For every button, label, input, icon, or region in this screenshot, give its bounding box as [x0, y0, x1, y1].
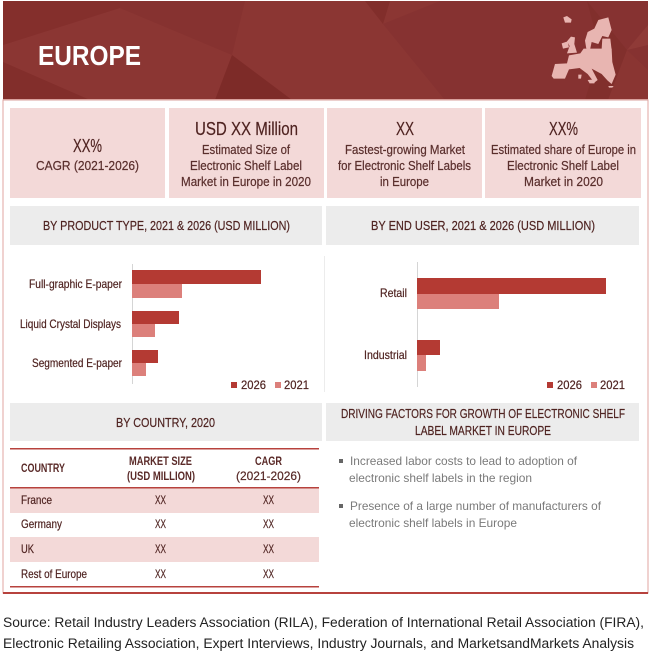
- table: by country: XX: [263, 493, 274, 507]
- table: by country: XX: [263, 542, 274, 556]
- table: by country: Rest of Europe: [21, 567, 87, 581]
- heading: by product type: BY PRODUCT TYPE, 2021 & 2026 (USD MILLION): [43, 218, 290, 233]
- legend: end user: [547, 378, 625, 392]
- bar chart: product type: Full-graphic E-paper: [29, 277, 122, 291]
- header banner: [3, 1, 648, 100]
- heading: by end user: [326, 206, 639, 245]
- panel: market size: Electronic Shelf Label: [190, 158, 302, 173]
- table: by country: [10, 448, 319, 588]
- bar chart: product type: Liquid Crystal Displays: [20, 317, 121, 331]
- table: by country: XX: [155, 517, 166, 531]
- source note: [3, 615, 644, 651]
- table: by country: COUNTRY: [21, 461, 65, 475]
- source note: Electronic Retailing Association, Expert Interviews, Industry Journals, and MarketsandMarkets Analysis: [3, 636, 634, 651]
- table: by country: Germany: [21, 517, 62, 531]
- panel: market size: Market in Europe in 2020: [181, 174, 311, 189]
- text block: driving factors bullets: electronic shelf labels in Europe: [349, 516, 517, 530]
- title: EUROPE: [38, 40, 141, 71]
- panel: fastest-growing market: in Europe: [380, 174, 429, 189]
- panel: CAGR: [10, 108, 165, 198]
- bar chart: end user: [324, 256, 625, 392]
- table: by country: UK: [21, 542, 34, 556]
- table: by country: MARKET SIZE: [129, 454, 192, 468]
- text block: driving factors bullets: electronic shelf labels in the region: [349, 471, 532, 485]
- table: by country: (2021-2026): [236, 469, 301, 483]
- source note: Source: Retail Industry Leaders Association (RILA), Federation of International Retail Association (FIRA),: [3, 615, 644, 630]
- icon: map of Europe: [552, 16, 616, 88]
- table: by country: (USD MILLION): [127, 469, 195, 483]
- panel: share of Europe: Market in 2020: [524, 174, 603, 189]
- bar chart: end user: Retail: [380, 286, 407, 300]
- table: by country: France: [21, 493, 52, 507]
- heading: driving factors: LABEL MARKET IN EUROPE: [415, 423, 551, 438]
- legend: end user: 2021: [600, 378, 625, 392]
- panel: CAGR: CAGR (2021-2026): [36, 158, 139, 173]
- legend: product type: [231, 378, 309, 392]
- panel: share of Europe: Electronic Shelf Label: [507, 158, 619, 173]
- heading: by product type: [10, 206, 322, 245]
- text block: driving factors bullets: [339, 454, 602, 530]
- heading: driving factors: [326, 403, 639, 441]
- panel: market size: [169, 108, 324, 198]
- page frame: [3, 100, 648, 594]
- panel: share of Europe: XX%: [549, 119, 578, 139]
- table: by country: XX: [263, 517, 274, 531]
- panel: market size: Estimated Size of: [202, 142, 290, 157]
- panel: fastest-growing market: for Electronic Shelf Labels: [338, 158, 471, 173]
- heading: by end user: BY END USER, 2021 & 2026 (USD MILLION): [371, 218, 595, 233]
- table: by country: XX: [155, 542, 166, 556]
- table: by country: XX: [155, 567, 166, 581]
- legend: product type: 2026: [241, 378, 266, 392]
- legend: product type: 2021: [284, 378, 309, 392]
- panel: fastest-growing market: Fastest-growing Market: [345, 142, 465, 157]
- bar chart: end user: Industrial: [364, 348, 407, 362]
- legend: end user: 2026: [557, 378, 582, 392]
- table: by country: CAGR: [255, 454, 282, 468]
- bar chart: product type: [20, 264, 309, 392]
- heading: by country: BY COUNTRY, 2020: [116, 415, 215, 430]
- text block: driving factors bullets: Increased labor costs to lead to adoption of: [350, 454, 578, 468]
- table: by country: XX: [155, 493, 166, 507]
- panel: fastest-growing market: [327, 108, 482, 198]
- bar chart: product type: Segmented E-paper: [32, 356, 122, 370]
- panel: CAGR: XX%: [73, 136, 102, 156]
- panel: share of Europe: [485, 108, 641, 198]
- table: by country: XX: [263, 567, 274, 581]
- text block: driving factors bullets: Presence of a large number of manufacturers of: [350, 499, 602, 513]
- panel: fastest-growing market: XX: [396, 119, 414, 139]
- heading: by country: [10, 403, 322, 441]
- panel: market size: USD XX Million: [195, 119, 298, 139]
